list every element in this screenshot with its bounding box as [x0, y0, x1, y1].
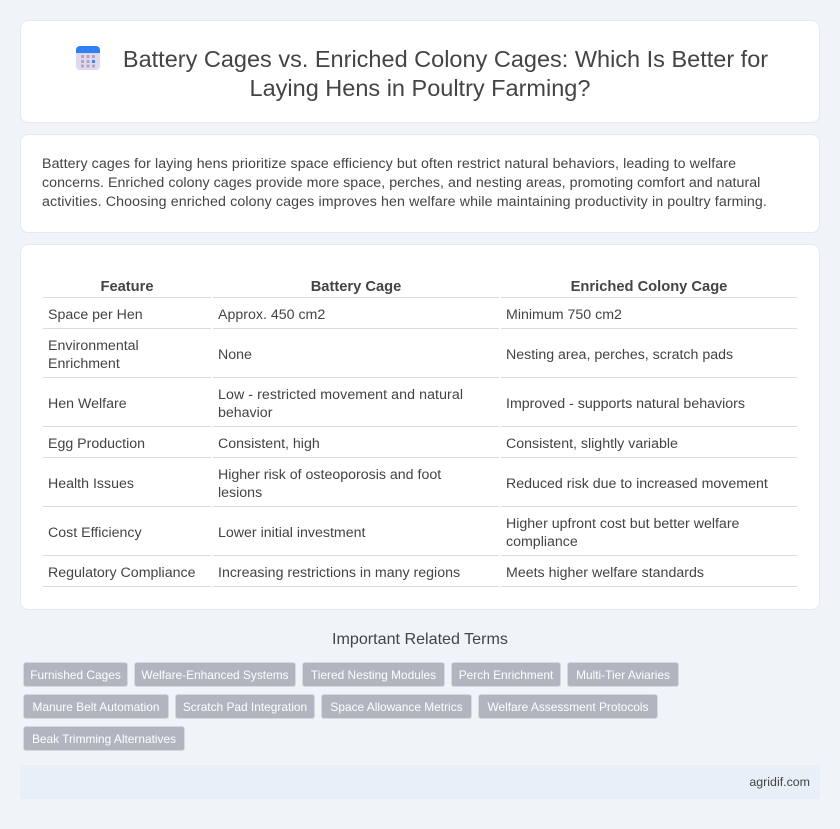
- tag: [302, 662, 445, 687]
- tag: [321, 694, 472, 719]
- header panel: [20, 20, 820, 123]
- cell: Nesting area, perches, scratch pads: [506, 347, 733, 363]
- tag: Multi-Tier Aviaries: [576, 668, 670, 682]
- icon: calendar: [76, 46, 100, 70]
- tag: [175, 694, 315, 719]
- tag: Furnished Cages: [30, 668, 121, 682]
- row: Health Issues: Health Issues: [48, 476, 134, 492]
- row: Hen Welfare: Hen Welfare: [48, 396, 127, 412]
- cell: Consistent, slightly variable: [506, 436, 678, 452]
- tag: [23, 662, 128, 687]
- row: Space per Hen: Space per Hen: [48, 307, 143, 323]
- tag: [451, 662, 561, 687]
- cell: [218, 467, 442, 501]
- tag: Perch Enrichment: [459, 668, 553, 682]
- cell: None: [218, 347, 252, 363]
- title: Laying Hens in Poultry Farming?: [250, 75, 590, 101]
- cell: Lower initial investment: [218, 525, 365, 541]
- header: Battery Cage: Battery Cage: [311, 279, 401, 295]
- tag: Tiered Nesting Modules: [311, 668, 436, 682]
- cell: Minimum 750 cm2: [506, 307, 622, 323]
- tag: Beak Trimming Alternatives: [32, 732, 176, 746]
- panel: comparison table: [20, 244, 820, 610]
- cell: compliance: [506, 534, 578, 550]
- title: Battery Cages vs. Enriched Colony Cages: Which Is Better for: [123, 46, 768, 72]
- cell: behavior: [218, 405, 272, 421]
- tag: Welfare Assessment Protocols: [487, 700, 649, 714]
- tag: [23, 726, 185, 751]
- title: [123, 46, 768, 101]
- cell: Meets higher welfare standards: [506, 565, 704, 581]
- row: Cost Efficiency: Cost Efficiency: [48, 525, 142, 541]
- row: Environmental Enrichment: [48, 338, 139, 372]
- tag: [134, 662, 296, 687]
- row: Environmental Enrichment: Enrichment: [48, 356, 120, 372]
- cell: Improved - supports natural behaviors: [506, 396, 745, 412]
- intro paragraph: [42, 156, 767, 210]
- tag: Manure Belt Automation: [33, 700, 159, 714]
- cell: Low - restricted movement and natural: [218, 387, 463, 403]
- panel: intro text: [20, 134, 820, 233]
- row: Egg Production: Egg Production: [48, 436, 145, 452]
- intro paragraph: activities. Choosing enriched colony cages improves hen welfare while maintaining productivity in poultry farming.: [42, 194, 767, 210]
- row: Environmental Enrichment: Environmental: [48, 338, 139, 354]
- tag: [23, 694, 169, 719]
- intro paragraph: Battery cages for laying hens prioritize space efficiency but often restrict natural behaviors, leading to welfare: [42, 156, 736, 172]
- cell: Consistent, high: [218, 436, 320, 452]
- tag: [478, 694, 658, 719]
- tag: Scratch Pad Integration: [183, 700, 307, 714]
- cell: lesions: [218, 485, 262, 501]
- tag: Space Allowance Metrics: [330, 700, 463, 714]
- header: Feature: Feature: [100, 279, 154, 295]
- heading: Important Related Terms: Important Related Terms: [332, 630, 508, 648]
- cell: Approx. 450 cm2: [218, 307, 325, 323]
- tag: Welfare-Enhanced Systems: [141, 668, 289, 682]
- cell: Higher risk of osteoporosis and foot: [218, 467, 441, 483]
- cell: Higher upfront cost but better welfare: [506, 516, 739, 532]
- cell: [506, 516, 739, 550]
- cell: [218, 387, 463, 421]
- row: Regulatory Compliance: Regulatory Compliance: [48, 565, 195, 581]
- cell: Increasing restrictions in many regions: [218, 565, 460, 581]
- intro paragraph: concerns. Enriched colony cages provide more space, perches, and nesting areas, promoting comfort and natural: [42, 175, 760, 191]
- header: Enriched Colony Cage: Enriched Colony Cage: [571, 279, 727, 295]
- footer bar: [20, 765, 820, 799]
- footer source: agridif.com: [749, 775, 810, 789]
- cell: Reduced risk due to increased movement: [506, 476, 768, 492]
- tag: [567, 662, 679, 687]
